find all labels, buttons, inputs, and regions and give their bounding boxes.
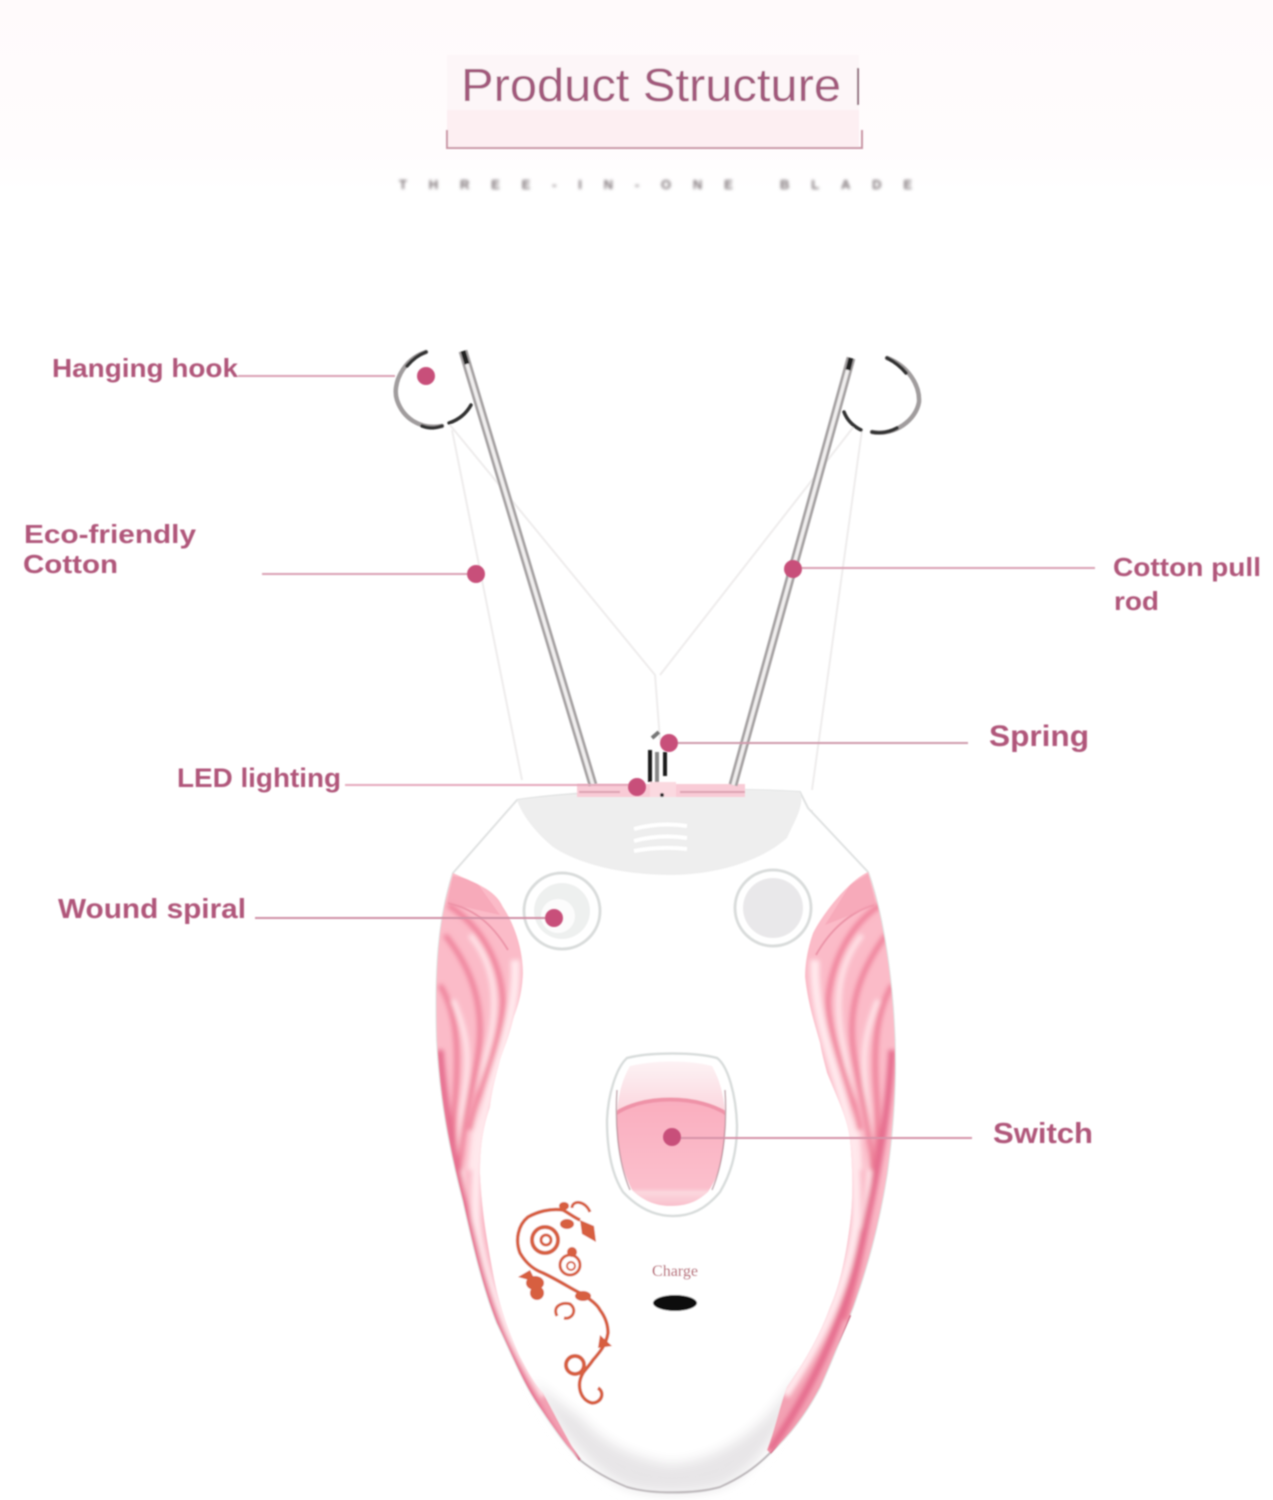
callout: wound spiral <box>58 893 563 927</box>
callout: eco-friendly cotton: Cotton <box>23 549 118 579</box>
callout: eco-friendly cotton: Eco-friendly <box>24 519 197 549</box>
switch <box>607 1054 737 1216</box>
callout: hanging hook: Hanging hook <box>52 353 239 383</box>
left pink wing <box>436 872 580 1459</box>
callout: wound spiral: Wound spiral <box>58 893 246 924</box>
callout: hanging hook <box>52 353 435 385</box>
callout: LED lighting: LED lighting <box>177 763 341 793</box>
callout: eco-friendly cotton <box>23 519 485 583</box>
top background band <box>0 0 1273 190</box>
wound spiral knobs <box>524 870 811 949</box>
callout: cotton pull rod <box>784 552 1261 616</box>
title <box>447 55 862 148</box>
callout: spring <box>660 720 1089 753</box>
device: product illustration <box>396 351 919 1493</box>
callout: cotton pull rod: rod <box>1114 586 1159 616</box>
body bottom shading <box>533 1367 803 1493</box>
pink top strip <box>577 784 745 797</box>
hanging hooks <box>396 352 919 433</box>
subtitle: THREE-IN-ONE BLADE <box>399 177 912 192</box>
device body <box>436 790 895 1493</box>
pull rods <box>463 351 593 785</box>
top cap <box>517 790 801 875</box>
callout: switch: Switch <box>993 1118 1093 1150</box>
callout: spring: Spring <box>989 720 1089 753</box>
title: Product Structure <box>461 59 841 111</box>
callout: LED lighting <box>177 763 646 796</box>
callout: cotton pull rod: Cotton pull <box>1113 552 1261 582</box>
right pink wing <box>766 872 896 1453</box>
spring <box>650 732 676 797</box>
floral decoration <box>518 1202 612 1403</box>
charge port: Charge <box>652 1263 698 1280</box>
cotton thread <box>450 425 862 870</box>
callout: switch <box>663 1118 1093 1150</box>
body edge line <box>490 1300 850 1492</box>
